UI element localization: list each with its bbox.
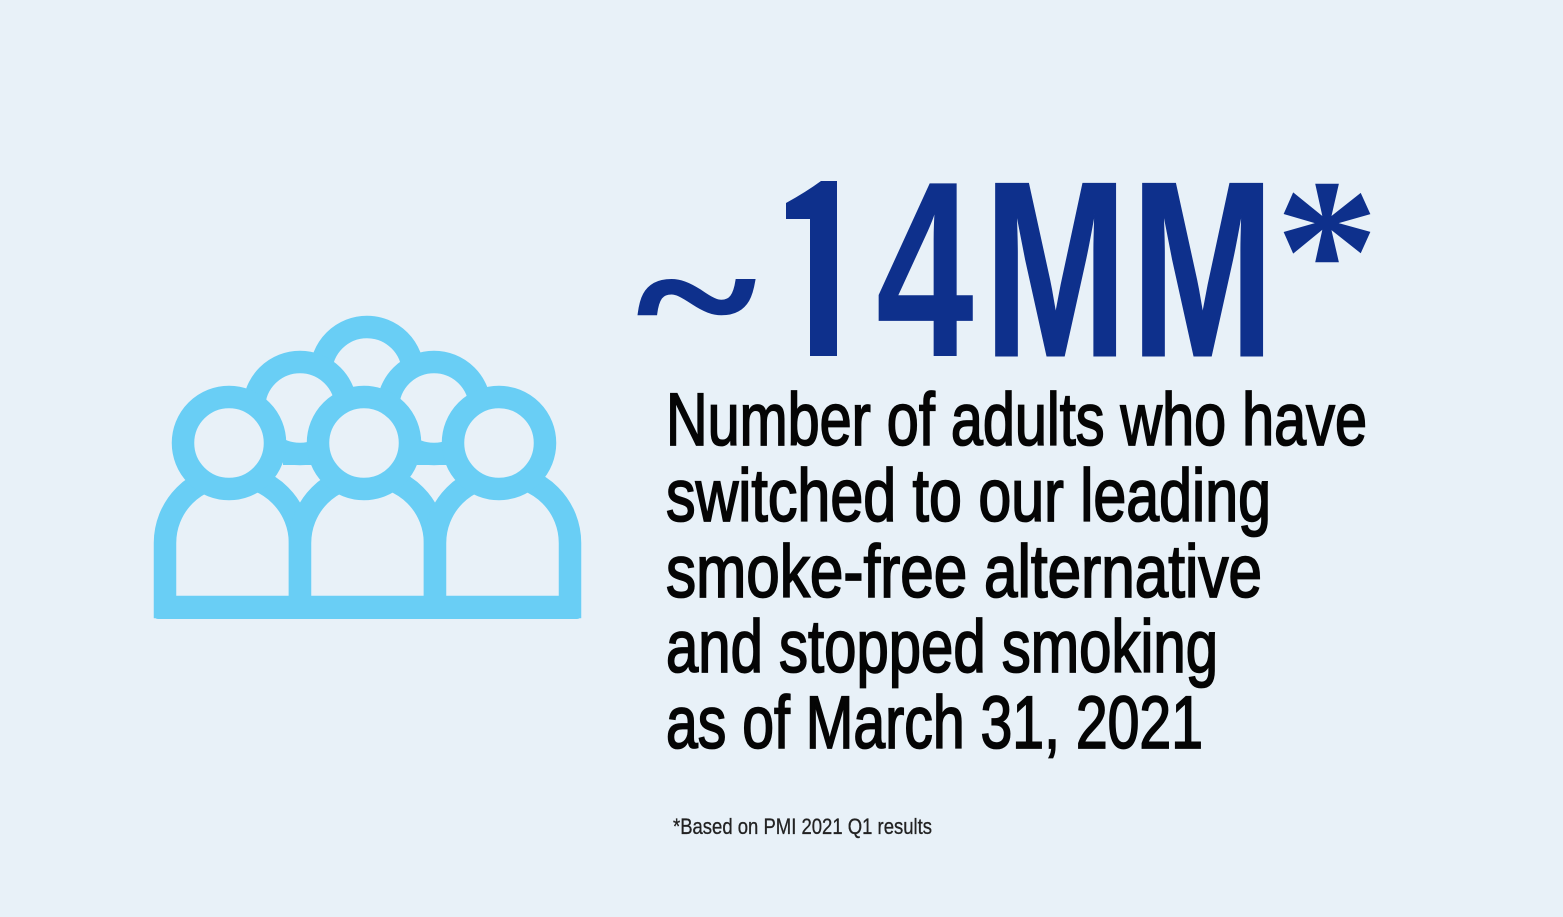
- digit 1: 1: [773, 129, 871, 409]
- icon: back row left head: [254, 362, 346, 454]
- description text: [666, 378, 1367, 764]
- description text: smoke-free alternative: [666, 530, 1262, 613]
- icon: back row right head: [388, 362, 480, 454]
- asterisk: *: [1275, 136, 1379, 366]
- letter M: M: [984, 128, 1127, 410]
- big number: [638, 181, 1370, 356]
- digit 4: 4: [876, 129, 974, 409]
- icon: front right head: [453, 397, 545, 489]
- icon: front left head: [183, 397, 275, 489]
- description text: as of March 31, 2021: [666, 681, 1203, 764]
- icon: floor bar: [154, 596, 581, 619]
- icon: back row top head: [321, 327, 413, 419]
- icon: front middle head: [318, 397, 410, 489]
- letter M: M: [1131, 128, 1274, 410]
- icon: group of people: [154, 327, 581, 619]
- digit 1: [786, 181, 837, 356]
- tilde: ~: [638, 198, 755, 393]
- icon: middle body: [300, 476, 435, 607]
- icon: left body: [165, 476, 300, 607]
- description text: Number of adults who have: [666, 378, 1367, 461]
- description text: and stopped smoking: [666, 605, 1218, 688]
- icon: right body: [435, 476, 570, 607]
- footnote: *Based on PMI 2021 Q1 results: [673, 814, 932, 839]
- description text: switched to our leading: [666, 454, 1271, 537]
